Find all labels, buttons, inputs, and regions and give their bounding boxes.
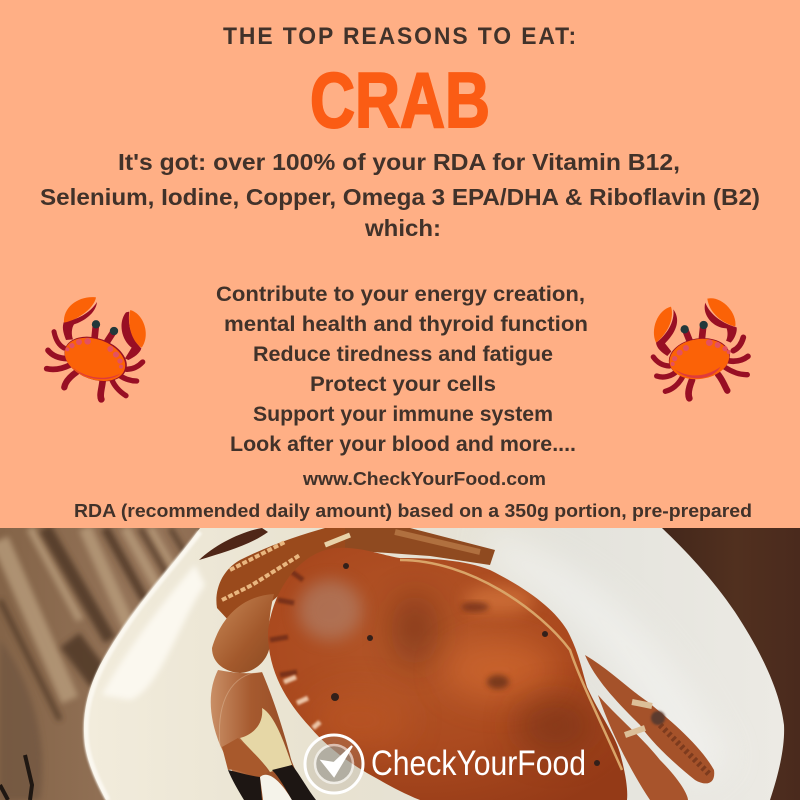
rda footnote: RDA (recommended daily amount) based on a 350g portion, pre-prepared: [74, 501, 752, 521]
carapace: [268, 548, 627, 800]
benefits list: Reduce tiredness and fatigue: [253, 343, 553, 366]
benefits list: Contribute to your energy creation,: [216, 283, 585, 306]
icon: check mark: [322, 746, 352, 776]
benefits list: mental health and thyroid function: [224, 313, 588, 336]
intro text block: Selenium, Iodine, Copper, Omega 3 EPA/DHA & Riboflavin (B2): [40, 184, 760, 210]
plate: [84, 528, 784, 800]
lower claw: [211, 670, 316, 800]
top legs: [199, 528, 495, 622]
intro text block: which:: [364, 215, 441, 241]
benefits list: Look after your blood and more....: [230, 433, 576, 456]
benefits list: [216, 283, 588, 456]
icon: right crab: [653, 298, 748, 398]
photo: crab on white plate: [0, 528, 800, 800]
upper claw: [212, 594, 274, 673]
icon: left crab: [47, 297, 146, 399]
logo wordmark: CheckYourFood: [371, 744, 586, 783]
heading: the top reasons to eat: THE TOP REASONS TO EAT:: [223, 23, 578, 50]
benefits list: Protect your cells: [310, 373, 496, 396]
right legs: [585, 655, 714, 800]
intro text block: [40, 149, 760, 241]
title: crab: CRAB: [310, 56, 490, 144]
benefits list: Support your immune system: [253, 403, 553, 426]
website url: www.CheckYourFood.com: [302, 469, 546, 489]
wooden table left: [0, 528, 200, 800]
logo badge: [305, 735, 363, 793]
intro text block: It's got: over 100% of your RDA for Vitamin B12,: [118, 149, 680, 175]
wooden table right: [662, 528, 800, 800]
